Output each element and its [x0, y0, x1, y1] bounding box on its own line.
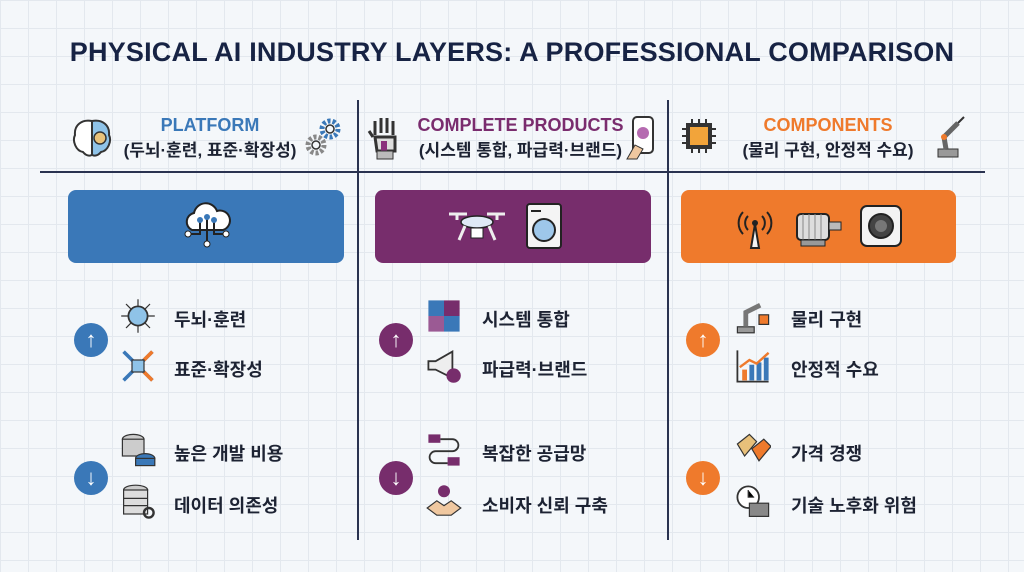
column 2 items	[379, 300, 608, 516]
item: high cost: 높은 개발 비용	[174, 444, 283, 464]
item: high cost	[122, 434, 283, 466]
header: complete products: COMPLETE PRODUCTS	[417, 115, 624, 135]
item: physical implementation	[736, 303, 862, 334]
item: tech obsolescence	[736, 486, 917, 517]
up circle: ↑	[86, 327, 96, 352]
icon: washing machine	[526, 203, 562, 249]
icon: cloud network	[184, 202, 231, 248]
down circle	[74, 461, 108, 495]
item: supply chain: 복잡한 공급망	[482, 444, 586, 464]
banner: components	[681, 190, 956, 263]
up circle	[686, 323, 720, 357]
column 3 items	[686, 303, 917, 517]
item: impact brand	[428, 350, 587, 383]
icon: gears	[306, 118, 340, 156]
icon: robot hand	[368, 118, 396, 160]
header: components	[682, 115, 965, 160]
item: system integration: 시스템 통합	[482, 310, 570, 330]
up circle	[74, 323, 108, 357]
item: stable demand	[736, 350, 879, 382]
item: price competition: 가격 경쟁	[791, 444, 862, 464]
item: physical implementation: 물리 구현	[791, 310, 862, 330]
up circle: ↑	[390, 327, 402, 352]
down circle: ↓	[698, 465, 708, 490]
icon: motor	[796, 213, 842, 246]
icon: brain	[72, 120, 112, 157]
down circle: ↓	[86, 465, 96, 490]
header: components: (물리 구현, 안정적 수요)	[742, 141, 913, 160]
item: impact brand: 파급력·브랜드	[482, 360, 587, 380]
item: price competition	[736, 434, 862, 464]
header: components: COMPONENTS	[763, 115, 892, 135]
title: PHYSICAL AI INDUSTRY LAYERS: A PROFESSIONAL COMPARISON	[70, 37, 954, 67]
item: standardization	[122, 350, 263, 382]
item: system integration	[428, 300, 570, 332]
header: platform	[72, 115, 340, 160]
item: consumer trust: 소비자 신뢰 구축	[482, 496, 608, 516]
header: complete products: (시스템 통합, 파급력·브랜드)	[419, 141, 622, 160]
item: supply chain	[428, 434, 586, 466]
header: platform: (두뇌·훈련, 표준·확장성)	[124, 141, 296, 160]
icon: phone	[626, 116, 654, 160]
down circle	[686, 461, 720, 495]
header: platform: PLATFORM	[161, 115, 259, 135]
down circle	[379, 461, 413, 495]
icon: robot arm	[938, 116, 965, 158]
column 1 items	[74, 299, 283, 519]
item: standardization: 표준·확장성	[174, 360, 263, 380]
item: tech obsolescence: 기술 노후화 위험	[791, 496, 917, 516]
icon: chip	[682, 119, 716, 153]
banner: platform	[68, 190, 344, 263]
item: brain training	[121, 299, 246, 333]
icon: drone	[449, 212, 505, 241]
item: brain training: 두뇌·훈련	[174, 310, 246, 330]
up circle: ↑	[698, 327, 708, 352]
item: consumer trust	[426, 485, 608, 516]
banner: complete products	[375, 190, 651, 263]
icon: sensor	[738, 211, 772, 249]
up circle	[379, 323, 413, 357]
item: stable demand: 안정적 수요	[791, 360, 879, 380]
header: complete products	[368, 115, 654, 160]
icon: camera	[860, 205, 902, 247]
item: data dependency	[123, 484, 278, 519]
down circle: ↓	[390, 465, 402, 490]
item: data dependency: 데이터 의존성	[174, 496, 278, 516]
